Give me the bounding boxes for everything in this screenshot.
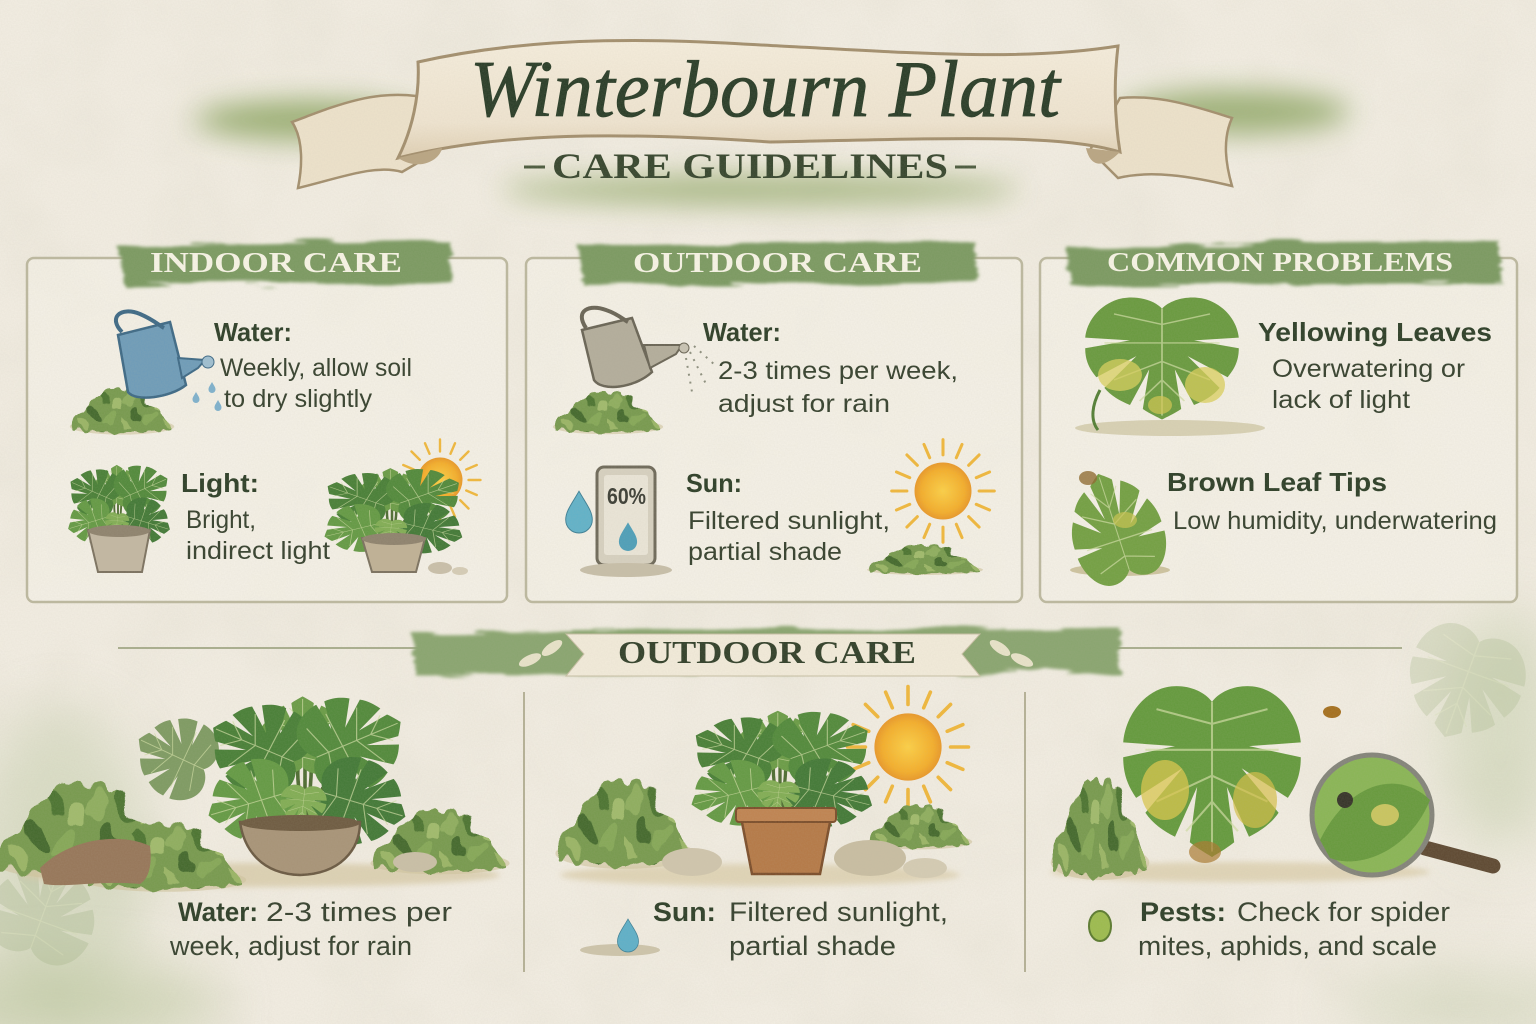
icon: potted plant — [59, 455, 179, 572]
light text — [181, 468, 330, 565]
brown tips text — [1167, 467, 1497, 535]
banner left tail — [292, 95, 440, 188]
panel frame — [526, 258, 1022, 602]
bottom sun text: Sun: — [653, 897, 716, 927]
bottom water text: week, adjust for rain — [169, 931, 412, 961]
water text: Water: — [214, 317, 292, 347]
panel frame — [27, 258, 507, 602]
icon: sun — [892, 440, 994, 542]
banner heading: OUTDOOR CARE — [618, 634, 916, 670]
bottom water text: Water: — [178, 897, 258, 927]
icon: shrubs — [867, 544, 983, 575]
yellowing text: Overwatering or — [1272, 355, 1465, 383]
banner folds — [398, 148, 1120, 164]
panel: common problems — [1040, 240, 1517, 602]
panel: outdoor care — [526, 240, 1022, 602]
subtitle: CARE GUIDELINES — [552, 146, 948, 186]
scene: terracotta plant in sun — [555, 687, 972, 886]
bottom sun text — [653, 897, 948, 961]
water text — [703, 317, 958, 418]
icon: plant in sun — [313, 440, 480, 575]
light text: Light: — [181, 468, 259, 498]
leaf sprig left — [517, 637, 565, 670]
water text: adjust for rain — [718, 390, 890, 418]
water text: Water: — [703, 317, 781, 347]
brown tips text: Low humidity, underwatering — [1173, 507, 1497, 535]
leaf sprig right — [987, 637, 1035, 670]
bottom pests text: mites, aphids, and scale — [1138, 931, 1437, 961]
title banner — [292, 40, 1232, 188]
bottom sun text: partial shade — [729, 931, 896, 961]
heading: INDOOR CARE — [150, 247, 402, 279]
magnifier handle — [1425, 848, 1493, 866]
heading brush — [578, 240, 978, 286]
icon: brown tip leaf — [1055, 460, 1176, 593]
banner brush — [412, 628, 1122, 676]
sun text: Filtered sunlight, — [688, 507, 890, 535]
icon: small water drop — [580, 919, 660, 956]
icon: metal watering can with plant — [553, 308, 716, 434]
bee — [1323, 706, 1341, 718]
bottom water text: 2-3 times per — [266, 897, 452, 927]
light text: Bright, — [186, 506, 256, 534]
column dividers — [524, 692, 1025, 972]
icon: humidity meter with drops — [566, 467, 672, 577]
icon: blue watering can with plant — [70, 311, 222, 435]
scene: leaf under magnifier — [1050, 686, 1493, 882]
sun text: partial shade — [688, 538, 842, 566]
heading brush — [1066, 240, 1502, 286]
panel: indoor care — [27, 240, 507, 602]
bottom pests text: Pests: — [1140, 897, 1226, 927]
water text — [214, 317, 412, 413]
scene: potted plant in garden — [0, 679, 510, 892]
panel frame — [1040, 258, 1517, 602]
icon: yellowing monstera leaf — [1075, 297, 1265, 436]
water text: 2-3 times per week, — [718, 357, 958, 385]
section banner: outdoor care — [118, 628, 1402, 676]
sun text: Sun: — [686, 468, 742, 498]
water text: Weekly, allow soil — [220, 354, 412, 382]
bottom pests text: Check for spider — [1237, 897, 1450, 927]
light text: indirect light — [186, 537, 330, 565]
icon: humidity meter with drops: 60% — [607, 483, 646, 509]
title: Winterbourn Plant — [470, 46, 1062, 134]
bottom sun text: Filtered sunlight, — [729, 897, 948, 927]
banner main ribbon — [398, 40, 1120, 158]
heading: OUTDOOR CARE — [633, 247, 922, 279]
yellowing text: lack of light — [1272, 386, 1410, 414]
banner label plate — [566, 634, 980, 676]
brown tips text: Brown Leaf Tips — [1167, 467, 1387, 497]
sun text — [686, 468, 890, 566]
heading brush — [118, 240, 452, 286]
water text: to dry slightly — [224, 385, 373, 413]
banner right tail — [1090, 97, 1232, 186]
bottom water text — [169, 897, 452, 961]
heading: COMMON PROBLEMS — [1107, 247, 1453, 277]
yellowing text: Yellowing Leaves — [1258, 317, 1492, 347]
yellowing text — [1258, 317, 1492, 414]
icon: small mite — [1089, 911, 1111, 941]
bottom pests text — [1138, 897, 1450, 961]
magnifier lens — [1312, 755, 1432, 875]
